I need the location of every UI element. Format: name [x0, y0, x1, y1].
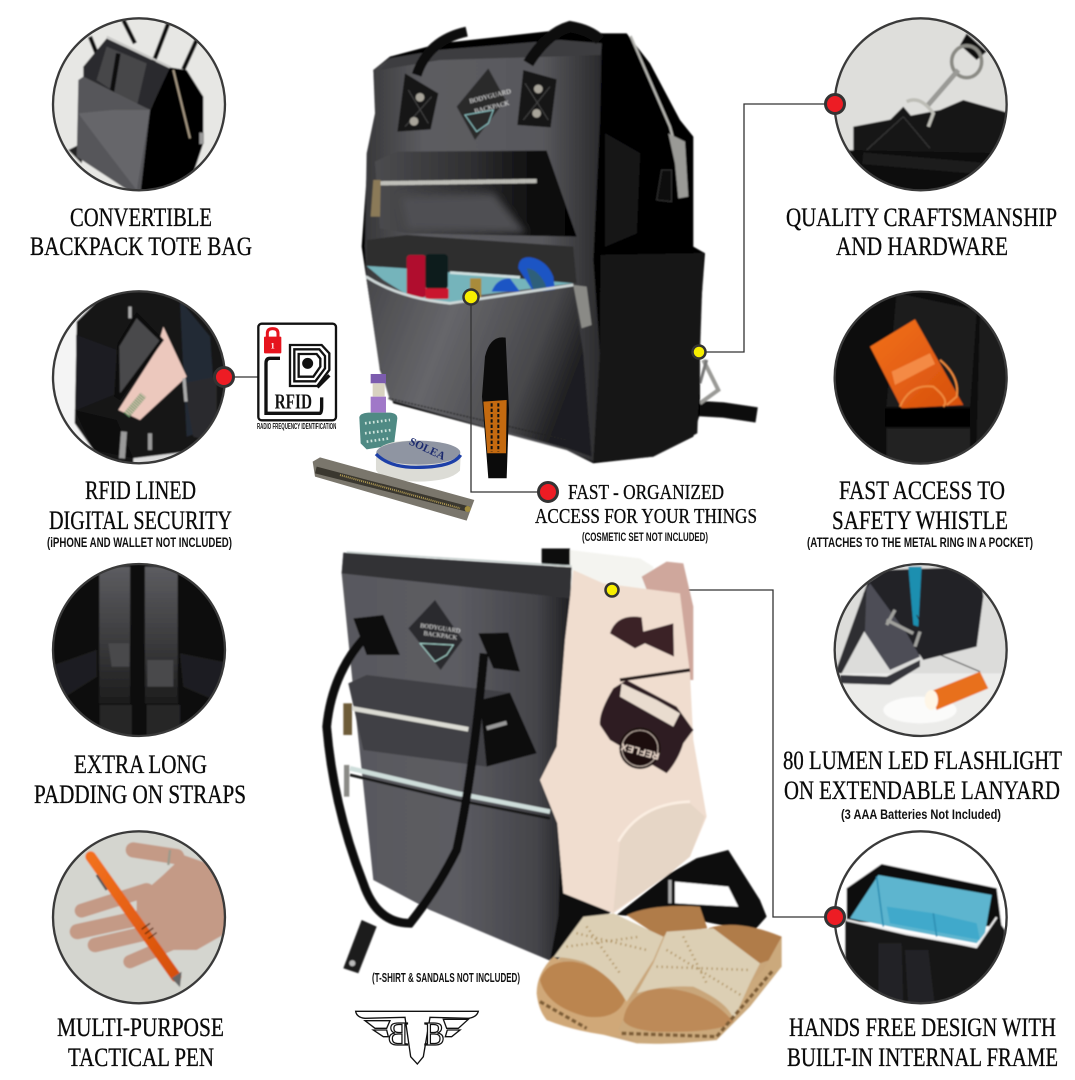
dot: hardware marker: [692, 346, 706, 358]
panel: internal frame: [787, 830, 1058, 1072]
top binding: [342, 553, 572, 598]
panel: tactical pen: [50, 830, 232, 1072]
heading: FAST ACCESS TO: [839, 476, 1005, 505]
callout: organized access: FAST - ORGANIZED: [568, 480, 724, 504]
panel: RFID lined: [47, 290, 232, 550]
brand patch: [457, 68, 512, 140]
icon: chip antenna: [266, 345, 329, 413]
callout: organized access: [535, 480, 757, 544]
dot: lower marker: [606, 584, 618, 596]
photo: metal clasp: [830, 17, 1017, 197]
panel: RFID lined: (iPHONE AND WALLET NOT INCLUDED): [47, 535, 232, 550]
shoulder strap and carabiner: [695, 360, 757, 415]
dot: RFID marker: [214, 368, 234, 386]
panel: safety whistle: [807, 290, 1033, 550]
panel: RFID lined: DIGITAL SECURITY: [49, 506, 232, 535]
shirt graphic: camera: [600, 670, 693, 773]
panel: padded straps: [34, 563, 246, 809]
rear strap: [617, 850, 767, 932]
heading: CONVERTIBLE: [70, 203, 212, 232]
seam: [388, 398, 567, 440]
top binding: [380, 40, 602, 70]
photo: open backpack: [50, 17, 230, 197]
boxed liner: [313, 457, 474, 521]
right sandal: [618, 937, 782, 1044]
dot: pocket marker: [464, 290, 478, 304]
handle tabs: [353, 615, 520, 672]
logo: BTB wings: B: [424, 1016, 445, 1053]
lower pocket: [367, 279, 592, 457]
laptop frame: [547, 550, 653, 600]
heading: MULTI-PURPOSE: [57, 1013, 224, 1042]
tin: [376, 436, 461, 482]
middle band: [367, 235, 577, 283]
panel: safety whistle: SAFETY WHISTLE: [832, 506, 1008, 535]
top zipper: [631, 36, 688, 202]
upper pocket: [371, 151, 577, 237]
photo: open bag interior: [830, 830, 1017, 1007]
RFID badge: RFID: [275, 392, 312, 414]
photo: pen on hand: [50, 830, 232, 1007]
note: t-shirt and sandals: (T-SHIRT & SANDALS NOT INCLUDED): [372, 971, 520, 985]
panel: flashlight: (3 AAA Batteries Not Included): [841, 807, 1001, 822]
cosmetics group: [313, 374, 474, 521]
lower zipper: [344, 765, 550, 818]
side panel: [593, 253, 703, 462]
brand patch: BACKPACK: [423, 630, 458, 642]
nail polish: [359, 374, 397, 449]
logo: BTB wings: B: [388, 1016, 408, 1053]
tote view photo: [327, 548, 782, 1044]
open pocket contents: [366, 254, 592, 328]
front panel: [365, 40, 602, 462]
panel: padded straps: PADDING ON STRAPS: [34, 780, 246, 809]
tin: SOLEA: [407, 436, 448, 463]
bag silhouette: [362, 30, 705, 463]
t-shirt: [540, 570, 707, 913]
panel: convertible tote: [30, 17, 252, 261]
brand patch: BODYGUARD: [420, 622, 461, 635]
handles: [397, 27, 600, 132]
tote front panel: [342, 553, 572, 961]
mascara: [482, 337, 509, 478]
RFID badge: [257, 324, 336, 431]
dot: frame marker: [826, 908, 844, 926]
shirt graphic: bow: [610, 617, 674, 657]
left sandal: [537, 957, 630, 1037]
photo: flashlight on lanyard: [830, 563, 1017, 740]
photo: orange whistle: [830, 290, 1017, 467]
panel: tactical pen: TACTICAL PEN: [68, 1043, 214, 1072]
side: [547, 573, 613, 963]
photo: phone in pocket: [50, 290, 230, 470]
dot: clasp marker: [826, 94, 844, 114]
heading: RFID LINED: [85, 476, 196, 505]
dot: callout marker: [538, 482, 558, 502]
shoulder handles: [327, 620, 484, 923]
panel: hardware: [786, 17, 1057, 261]
brand patch: [408, 600, 463, 670]
panel: convertible tote: BACKPACK TOTE BAG: [30, 232, 252, 261]
logo: BTB wings: [356, 1011, 478, 1064]
upper pocket: [343, 675, 537, 767]
brand patch: BODYGUARD: [469, 88, 512, 105]
icon: lock: 1: [270, 341, 275, 351]
callout: organized access: ACCESS FOR YOUR THINGS: [535, 504, 757, 528]
callout: organized access: (COSMETIC SET NOT INCLUDED): [582, 530, 708, 544]
photo: padded straps: [50, 563, 230, 740]
panel: hardware: AND HARDWARE: [836, 232, 1008, 261]
brand patch: BACKPACK: [474, 100, 510, 115]
fold highlight: [605, 133, 640, 247]
RFID badge: RADIO FREQUENCY IDENTIFICATION: [257, 422, 336, 431]
panel: flashlight: [783, 563, 1062, 822]
heading: EXTRA LONG: [74, 750, 207, 779]
connector lines: [224, 104, 835, 917]
shirt graphic: camera: REFLEX: [620, 740, 661, 761]
cork sandals: [537, 906, 782, 1044]
strap tab: [343, 920, 377, 973]
floral fabric: [642, 562, 693, 680]
main backpack photo: [362, 27, 757, 463]
